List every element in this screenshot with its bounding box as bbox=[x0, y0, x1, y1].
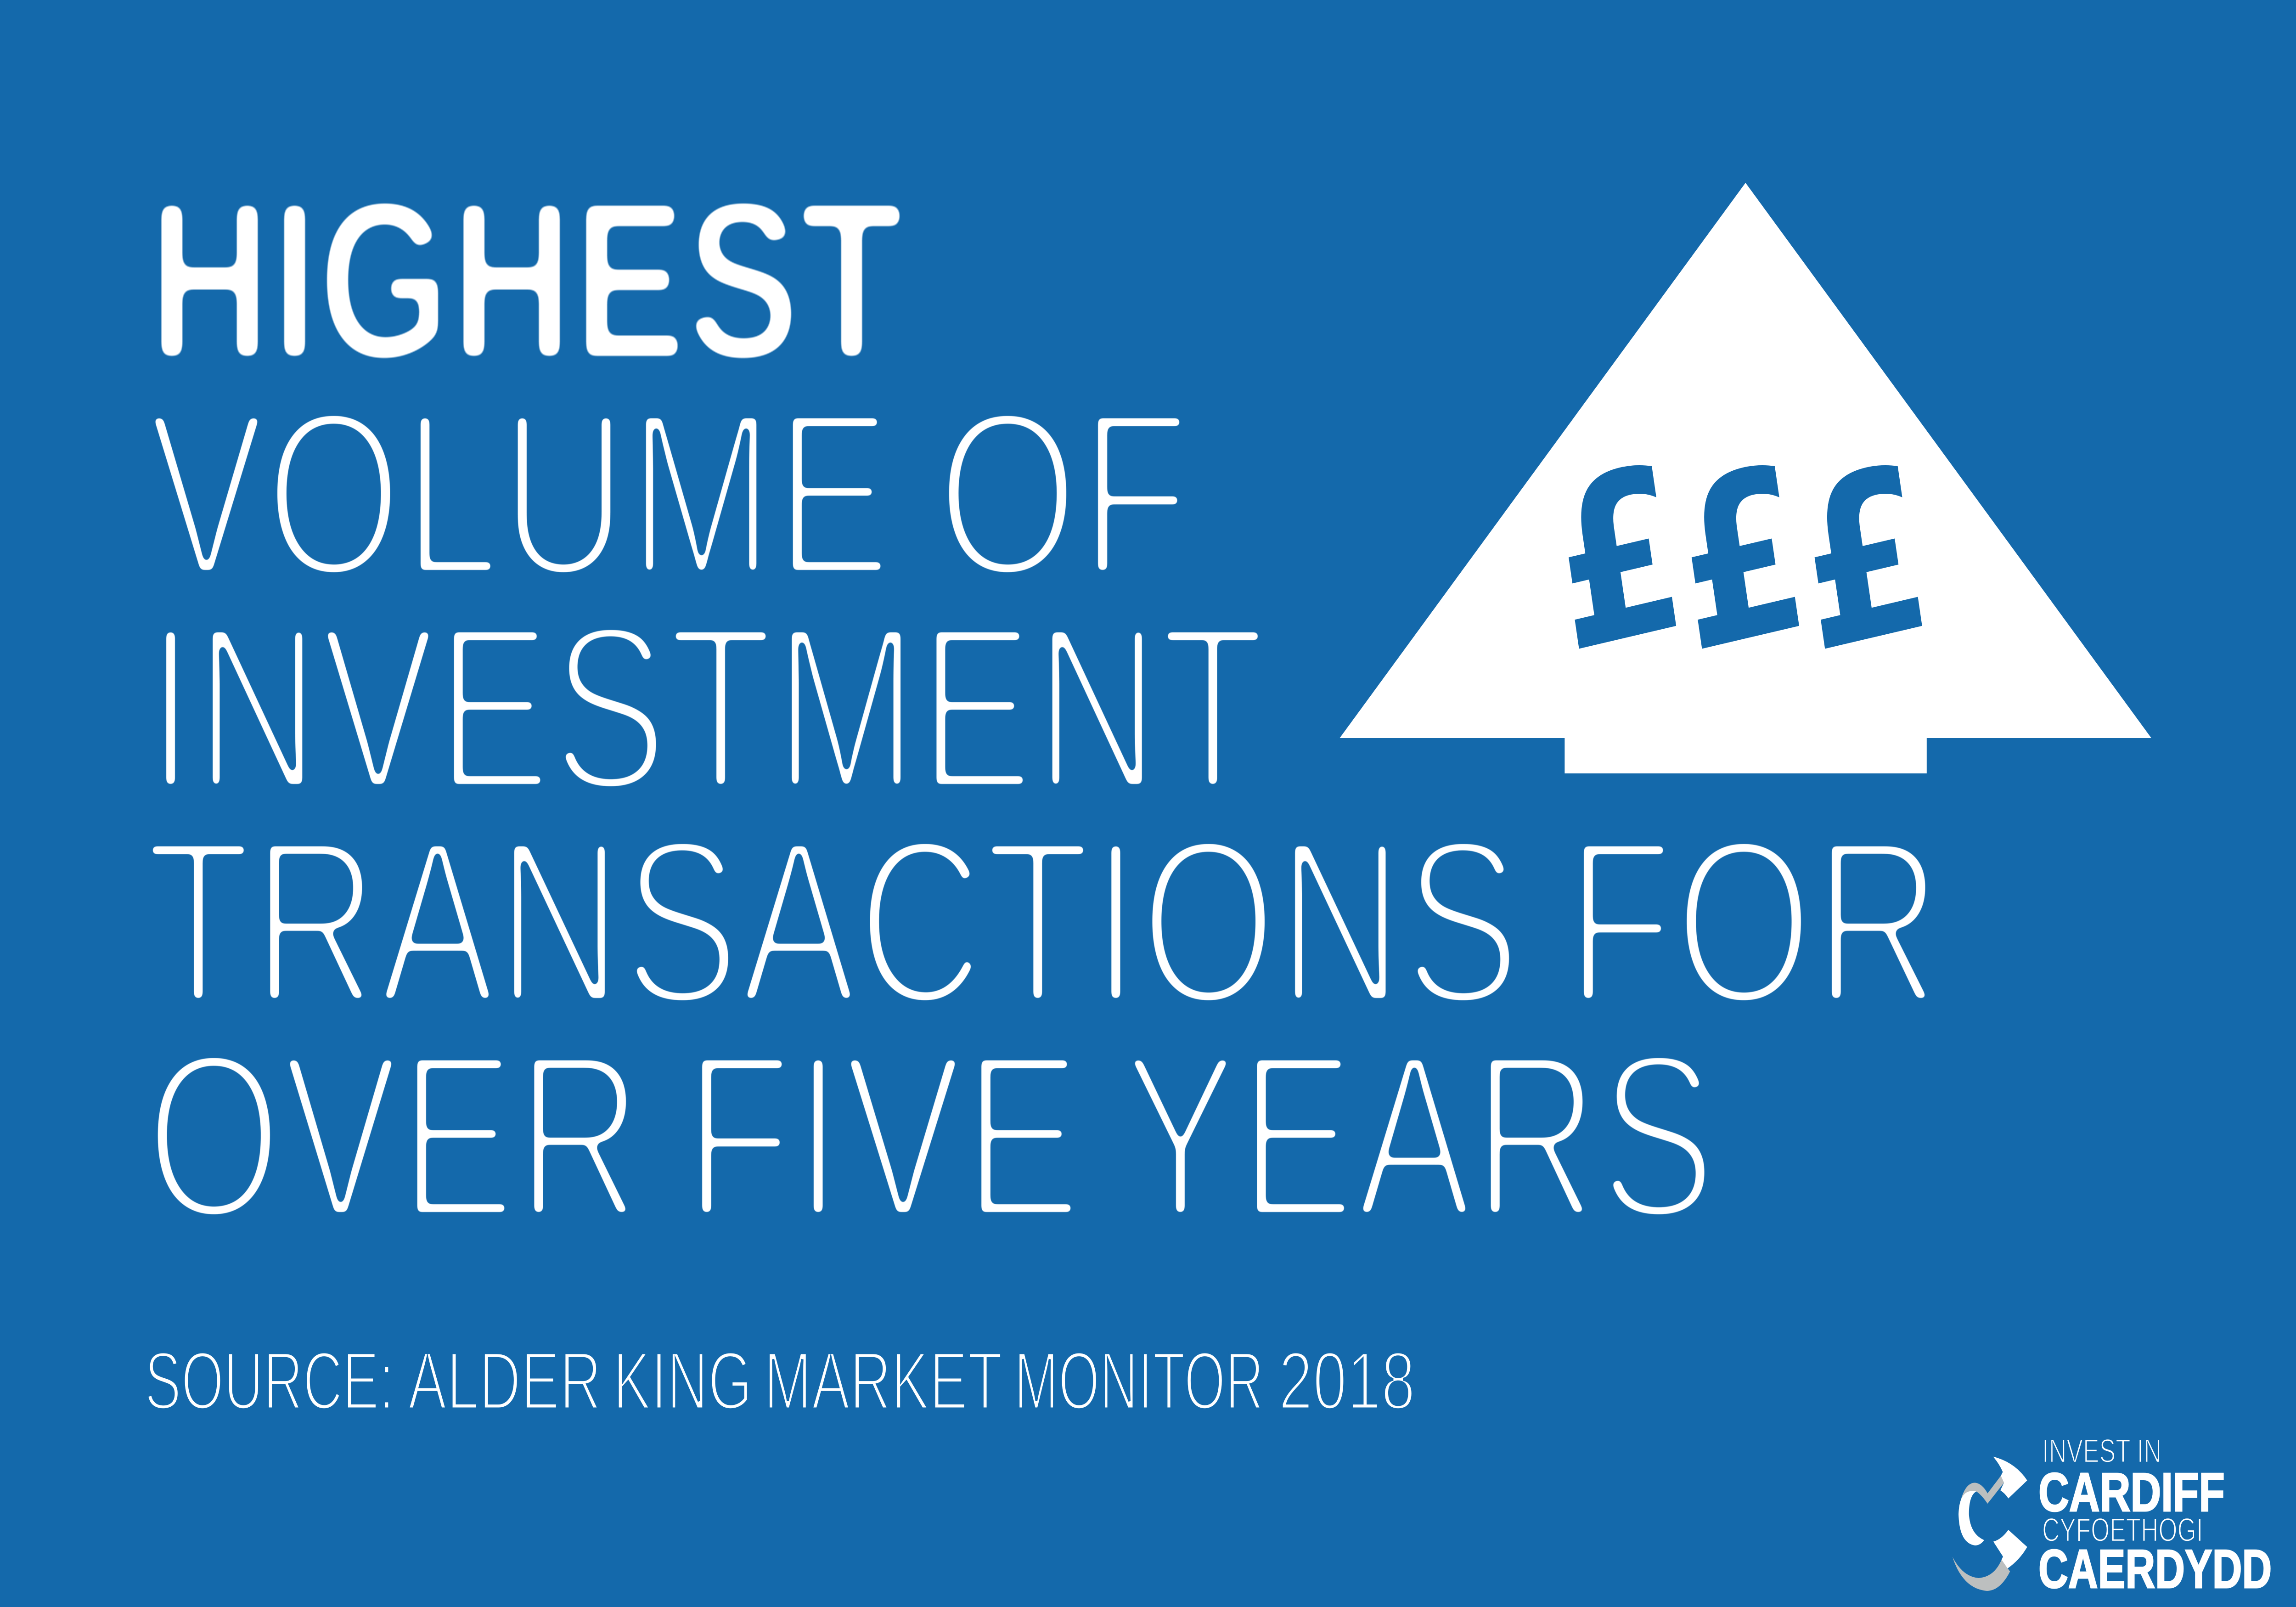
title bbox=[145, 155, 1942, 1267]
logo wordmark: CARDIFF bbox=[2038, 1461, 2225, 1523]
title line: OVER FIVE YEARS bbox=[146, 1004, 1716, 1267]
icon: upward arrow with pound signs bbox=[1339, 183, 2151, 773]
title line: VOLUME OF: VOLUME bbox=[147, 362, 892, 625]
logo wordmark: CAERDYDD bbox=[2038, 1538, 2272, 1600]
title line: VOLUME OF: OF bbox=[936, 362, 1191, 625]
source note: SOURCE: bbox=[145, 1335, 394, 1427]
title line: TRANSACTIONS FOR: TRANSACTIONS bbox=[145, 790, 1521, 1053]
logo mark bbox=[1953, 1457, 2027, 1591]
logo: Invest in Cardiff bbox=[1953, 1432, 2272, 1600]
pound signs: £ bbox=[1538, 415, 1699, 705]
pound signs bbox=[1538, 415, 1944, 705]
source note: ALDER bbox=[408, 1335, 602, 1427]
source note: 2018 bbox=[1278, 1335, 1415, 1427]
title line: TRANSACTIONS FOR: FOR bbox=[1565, 790, 1942, 1053]
source note: MARKET bbox=[764, 1335, 1002, 1427]
title line: OVER FIVE YEARS: OVER bbox=[146, 1004, 643, 1267]
pound signs: £ bbox=[1784, 415, 1944, 705]
source note bbox=[145, 1335, 1415, 1427]
source note: MONITOR bbox=[1014, 1335, 1264, 1427]
title line: OVER FIVE YEARS: FIVE bbox=[684, 1004, 1082, 1267]
logo wordmark bbox=[2038, 1432, 2272, 1600]
logo wordmark: CYFOETHOGI bbox=[2042, 1511, 2203, 1549]
title line: OVER FIVE YEARS: YEARS bbox=[1122, 1004, 1716, 1267]
title line: HIGHEST: HIGHEST bbox=[148, 155, 904, 406]
pound signs: £ bbox=[1661, 415, 1822, 705]
source note: KING bbox=[613, 1335, 752, 1427]
title line: INVESTMENT: INVESTMENT bbox=[146, 576, 1266, 839]
arrow shape bbox=[1339, 183, 2151, 773]
logo wordmark: INVEST IN bbox=[2042, 1432, 2161, 1470]
